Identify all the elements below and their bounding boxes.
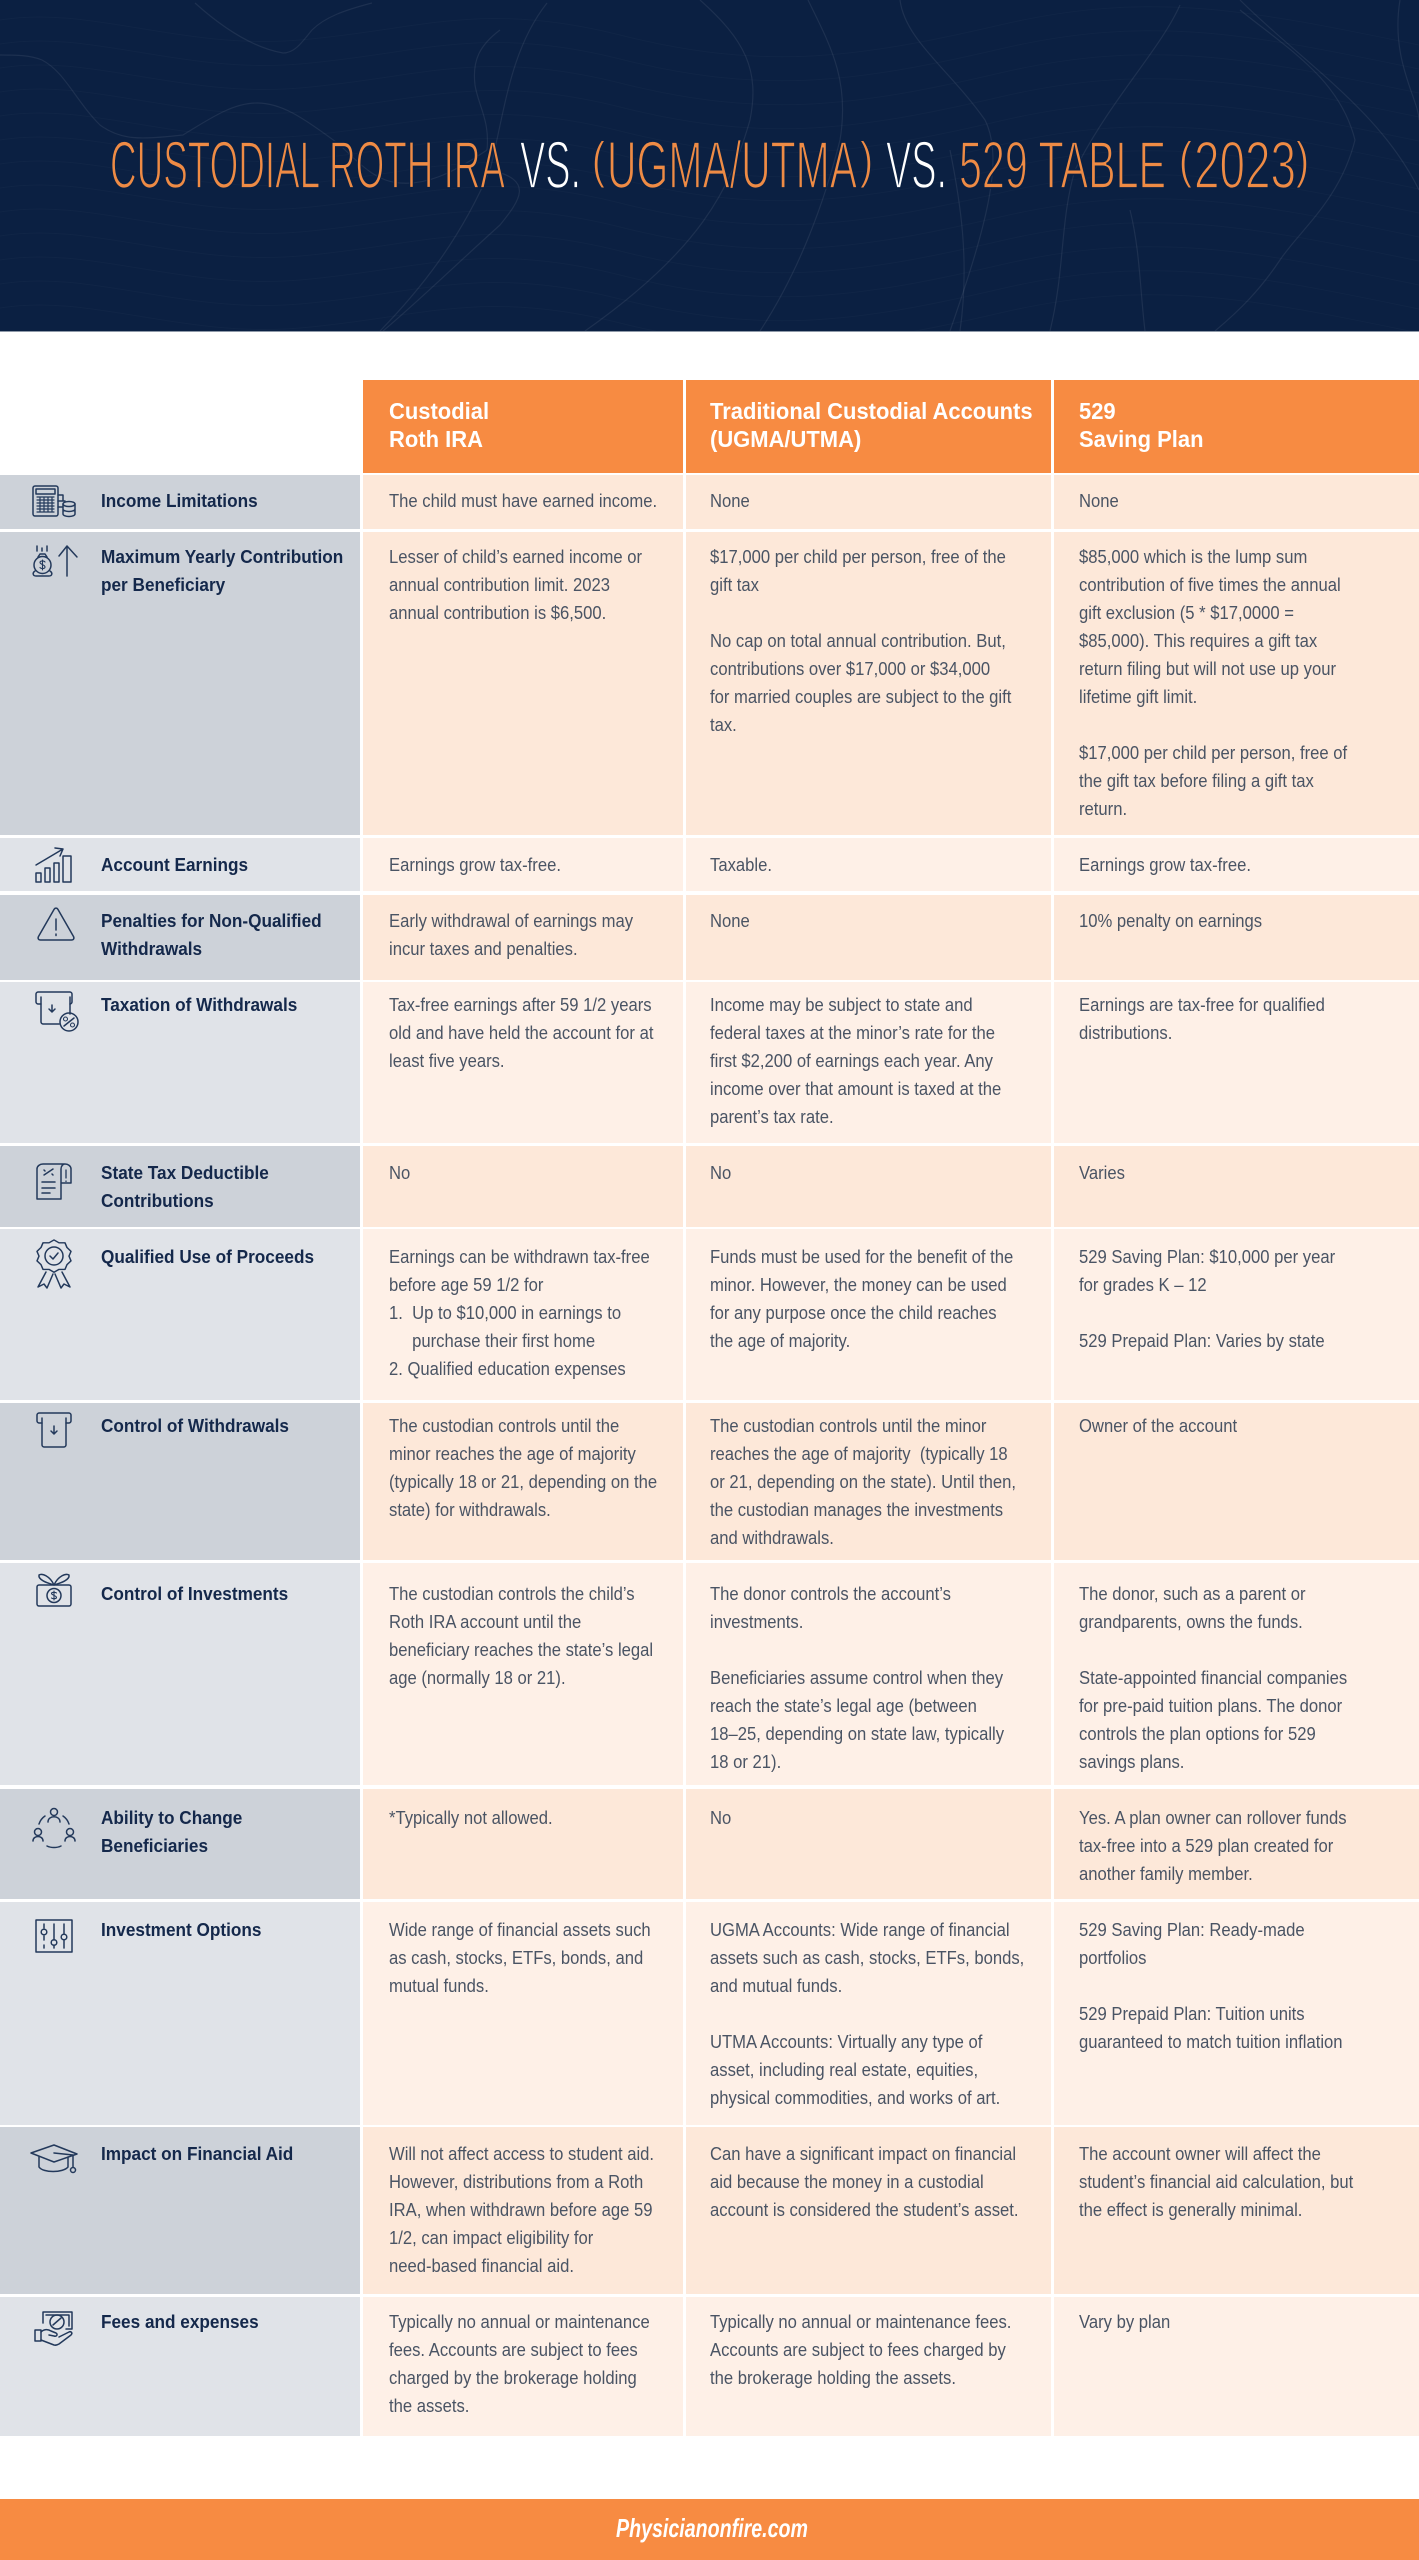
Roth IRA: Wide range of financial assets such as cash, stocks, ETFs, bonds, and mutual funds. xyxy=(389,1920,651,1996)
Roth IRA: The custodian controls the child’s Roth IRA account until the beneficiary reaches the state’s legal age (normally 18 or 21). xyxy=(389,1584,653,1688)
529 xyxy=(1054,1403,1419,1560)
row label xyxy=(0,895,360,980)
footer bar xyxy=(0,2499,1419,2560)
529: The donor, such as a parent or grandparents, owns the funds. State-appointed financial companies for pre-paid tuition plans. The donor controls the plan options for 529 savings plans. xyxy=(1079,1584,1347,1772)
row: State Tax Deductible Contributions xyxy=(0,1146,1419,1227)
row: Control of Withdrawals xyxy=(0,1403,1419,1560)
529 xyxy=(1054,1146,1419,1227)
icon: people circle xyxy=(32,1808,76,1848)
row label xyxy=(0,838,360,891)
icon: money sprout xyxy=(36,1574,72,1607)
row label xyxy=(0,1403,360,1560)
529 xyxy=(1054,1229,1419,1400)
529: $85,000 which is the lump sum contribution of five times the annual gift exclusion (5 * $17,0000 = $85,000). This requires a gift tax return filing but will not use up your lifetime gift limit. $17,000 per child per person, free of the gift tax before filing a gift tax return. xyxy=(1079,547,1347,819)
row: Control of Investments xyxy=(0,1563,1419,1785)
row: Impact on Financial Aid xyxy=(0,2127,1419,2294)
Roth IRA: The child must have earned income. xyxy=(389,491,657,511)
UGMA/UTMA xyxy=(686,1563,1051,1785)
row label: Fees and expenses xyxy=(101,2312,259,2332)
UGMA/UTMA: Can have a significant impact on financial aid because the money in a custodial account is considered the student’s asset. xyxy=(710,2144,1019,2220)
icon: hand holding fee xyxy=(34,2311,73,2346)
icon: growth bar chart xyxy=(35,847,72,883)
row label: Taxation of Withdrawals xyxy=(101,995,297,1015)
column heading: Traditional Custodial Accounts xyxy=(686,380,1051,473)
icon: calculator and coins xyxy=(32,485,76,518)
icon: ATM slot with percent xyxy=(35,991,79,1032)
column heading: Custodial Roth IRA xyxy=(363,380,683,473)
Roth IRA: No xyxy=(389,1163,410,1183)
Roth IRA xyxy=(363,1902,683,2125)
icon: ATM slot xyxy=(36,1412,72,1448)
row: Investment Options xyxy=(0,1902,1419,2125)
529 xyxy=(1054,895,1419,980)
Roth IRA xyxy=(363,838,683,891)
529 xyxy=(1054,2127,1419,2294)
icon: graduation cap xyxy=(30,2144,78,2174)
row label xyxy=(0,1902,360,2125)
row label: Account Earnings xyxy=(101,855,248,875)
title: ( xyxy=(592,132,605,188)
529: 529 Saving Plan: $10,000 per year for grades K – 12 529 Prepaid Plan: Varies by state xyxy=(1079,1247,1335,1351)
row: Ability to Change Beneficiaries xyxy=(0,1789,1419,1899)
title: ( xyxy=(1179,132,1192,188)
column heading: 529 Saving Plan xyxy=(1054,380,1419,473)
Roth IRA xyxy=(363,532,683,835)
row: Income Limitations xyxy=(0,475,1419,529)
row label: State Tax Deductible Contributions xyxy=(101,1163,269,1211)
Roth IRA xyxy=(363,1403,683,1560)
title: CUSTODIAL ROTH IRA xyxy=(110,128,505,203)
row: Taxation of Withdrawals xyxy=(0,982,1419,1143)
Roth IRA xyxy=(363,1789,683,1899)
icon: warning triangle xyxy=(37,907,75,941)
row: Qualified Use of Proceeds xyxy=(0,1229,1419,1400)
529: Varies xyxy=(1079,1163,1125,1183)
529 xyxy=(1054,982,1419,1143)
row: Account Earnings xyxy=(0,838,1419,891)
Roth IRA: Tax-free earnings after 59 1/2 years old and have held the account for at least five years. xyxy=(389,995,653,1071)
Roth IRA: Typically no annual or maintenance fees. Accounts are subject to fees charged by the brokerage holding the assets. xyxy=(389,2312,650,2416)
UGMA/UTMA xyxy=(686,475,1051,529)
column heading: Traditional Custodial Accounts: Traditional Custodial Accounts xyxy=(710,398,1033,424)
529 xyxy=(1054,1563,1419,1785)
529: Vary by plan xyxy=(1079,2312,1170,2332)
row label: Qualified Use of Proceeds xyxy=(101,1247,314,1267)
Roth IRA xyxy=(363,2297,683,2436)
529: Owner of the account xyxy=(1079,1416,1237,1436)
529: Yes. A plan owner can rollover funds tax-free into a 529 plan created for another family member. xyxy=(1079,1808,1347,1884)
UGMA/UTMA: Income may be subject to state and federal taxes at the minor’s rate for the first $2,200 of earnings each year. Any income over that amount is taxed at the parent’s tax rate. xyxy=(710,995,1001,1127)
UGMA/UTMA: Taxable. xyxy=(710,855,772,875)
UGMA/UTMA: None xyxy=(710,911,750,931)
Roth IRA: Will not affect access to student aid. However, distributions from a Roth IRA, when withdrawn before age 59 1/2, can impact eligibility for need-based financial aid. xyxy=(389,2144,654,2276)
title: VS. xyxy=(886,128,947,203)
row: Fees and expenses xyxy=(0,2297,1419,2436)
UGMA/UTMA xyxy=(686,838,1051,891)
UGMA/UTMA xyxy=(686,2297,1051,2436)
Roth IRA: The custodian controls until the minor reaches the age of majority (typically 18 or 21, depending on the state) for withdrawals. xyxy=(389,1416,657,1520)
UGMA/UTMA xyxy=(686,2127,1051,2294)
title xyxy=(110,128,1309,203)
title: VS. xyxy=(520,128,581,203)
Roth IRA: Lesser of child’s earned income or annual contribution limit. 2023 annual contribution is $6,500. xyxy=(389,547,642,623)
Roth IRA xyxy=(363,1146,683,1227)
UGMA/UTMA xyxy=(686,1789,1051,1899)
icon: tax document xyxy=(36,1163,72,1200)
UGMA/UTMA xyxy=(686,895,1051,980)
icon: money bag with up arrow xyxy=(32,545,78,577)
row label xyxy=(0,1229,360,1400)
row label: Maximum Yearly Contribution per Beneficiary xyxy=(101,547,343,595)
row label: Income Limitations xyxy=(101,491,258,511)
529 xyxy=(1054,1902,1419,2125)
Roth IRA: Earnings grow tax-free. xyxy=(389,855,561,875)
UGMA/UTMA xyxy=(686,982,1051,1143)
row label xyxy=(0,532,360,835)
row label xyxy=(0,475,360,529)
row: Maximum Yearly Contribution xyxy=(0,532,1419,835)
row label: Ability to Change Beneficiaries xyxy=(101,1808,242,1856)
title: UGMA/UTMA xyxy=(607,128,857,203)
row label xyxy=(0,2127,360,2294)
row label: Investment Options xyxy=(101,1920,261,1940)
529: Earnings are tax-free for qualified distributions. xyxy=(1079,995,1325,1043)
title: ) xyxy=(1296,132,1309,188)
529: 529 Saving Plan: Ready-made portfolios 529 Prepaid Plan: Tuition units guaranteed to match tuition inflation xyxy=(1079,1920,1343,2052)
529: 10% penalty on earnings xyxy=(1079,911,1262,931)
UGMA/UTMA: Funds must be used for the benefit of the minor. However, the money can be used for any purpose once the child reaches the age of majority. xyxy=(710,1247,1013,1351)
title: 2023 xyxy=(1194,128,1296,203)
row label: Control of Investments xyxy=(101,1584,288,1604)
529: The account owner will affect the student’s financial aid calculation, but the effect is generally minimal. xyxy=(1079,2144,1353,2220)
column heading: Custodial Roth IRA: Roth IRA xyxy=(389,426,483,452)
UGMA/UTMA: $17,000 per child per person, free of the gift tax No cap on total annual contribution. But, contributions over $17,000 or $34,000 for married couples are subject to the gift tax. xyxy=(710,547,1011,735)
column heading: 529 Saving Plan: Saving Plan xyxy=(1079,426,1204,452)
Roth IRA xyxy=(363,1563,683,1785)
header banner xyxy=(0,0,1419,332)
529 xyxy=(1054,2297,1419,2436)
icon: sliders xyxy=(35,1919,73,1953)
row label xyxy=(0,1789,360,1899)
Roth IRA xyxy=(363,2127,683,2294)
Roth IRA xyxy=(363,475,683,529)
footer website: Physicianonfire.com xyxy=(616,2513,808,2543)
UGMA/UTMA xyxy=(686,1229,1051,1400)
title: ) xyxy=(860,132,873,188)
column heading: Custodial Roth IRA: Custodial xyxy=(389,398,489,424)
column heading: Traditional Custodial Accounts: (UGMA/UTMA) xyxy=(710,426,861,452)
UGMA/UTMA: None xyxy=(710,491,750,511)
529 xyxy=(1054,838,1419,891)
UGMA/UTMA: No xyxy=(710,1163,731,1183)
Roth IRA xyxy=(363,1229,683,1400)
row label: Control of Withdrawals xyxy=(101,1416,289,1436)
529 xyxy=(1054,1789,1419,1899)
UGMA/UTMA: UGMA Accounts: Wide range of financial assets such as cash, stocks, ETFs, bonds, and mutual funds. UTMA Accounts: Virtually any type of asset, including real estate, equities, physical commodities, and works of art. xyxy=(710,1920,1024,2108)
title: 529 TABLE xyxy=(959,128,1166,203)
Roth IRA: Early withdrawal of earnings may incur taxes and penalties. xyxy=(389,911,633,959)
529: None xyxy=(1079,491,1119,511)
UGMA/UTMA xyxy=(686,1146,1051,1227)
row label: Impact on Financial Aid xyxy=(101,2144,293,2164)
row label: Penalties for Non-Qualified Withdrawals xyxy=(101,911,322,959)
UGMA/UTMA: The custodian controls until the minor reaches the age of majority (typically 18 or 21, depending on the state). Until then, the custodian manages the investments and withdrawals. xyxy=(710,1416,1016,1548)
UGMA/UTMA: No xyxy=(710,1808,731,1828)
row label xyxy=(0,1563,360,1785)
row label xyxy=(0,2297,360,2436)
UGMA/UTMA: Typically no annual or maintenance fees. Accounts are subject to fees charged by the brokerage holding the assets. xyxy=(710,2312,1011,2388)
UGMA/UTMA: The donor controls the account’s investments. Beneficiaries assume control when they reach the state’s legal age (between 18–25, depending on state law, typically 18 or 21). xyxy=(710,1584,1004,1772)
Roth IRA xyxy=(363,982,683,1143)
row label xyxy=(0,1146,360,1227)
UGMA/UTMA xyxy=(686,532,1051,835)
column heading: 529 Saving Plan: 529 xyxy=(1079,398,1116,424)
Roth IRA: Earnings can be withdrawn tax-free before age 59 1/2 for 1. Up to $10,000 in earnings to purchase their first home 2. Qualified education expenses xyxy=(389,1247,650,1379)
529: Earnings grow tax-free. xyxy=(1079,855,1251,875)
icon: award ribbon xyxy=(36,1239,72,1289)
Roth IRA: *Typically not allowed. xyxy=(389,1808,553,1828)
row: Penalties for Non-Qualified Withdrawals xyxy=(0,895,1419,980)
529 xyxy=(1054,475,1419,529)
row label xyxy=(0,982,360,1143)
529 xyxy=(1054,532,1419,835)
Roth IRA xyxy=(363,895,683,980)
